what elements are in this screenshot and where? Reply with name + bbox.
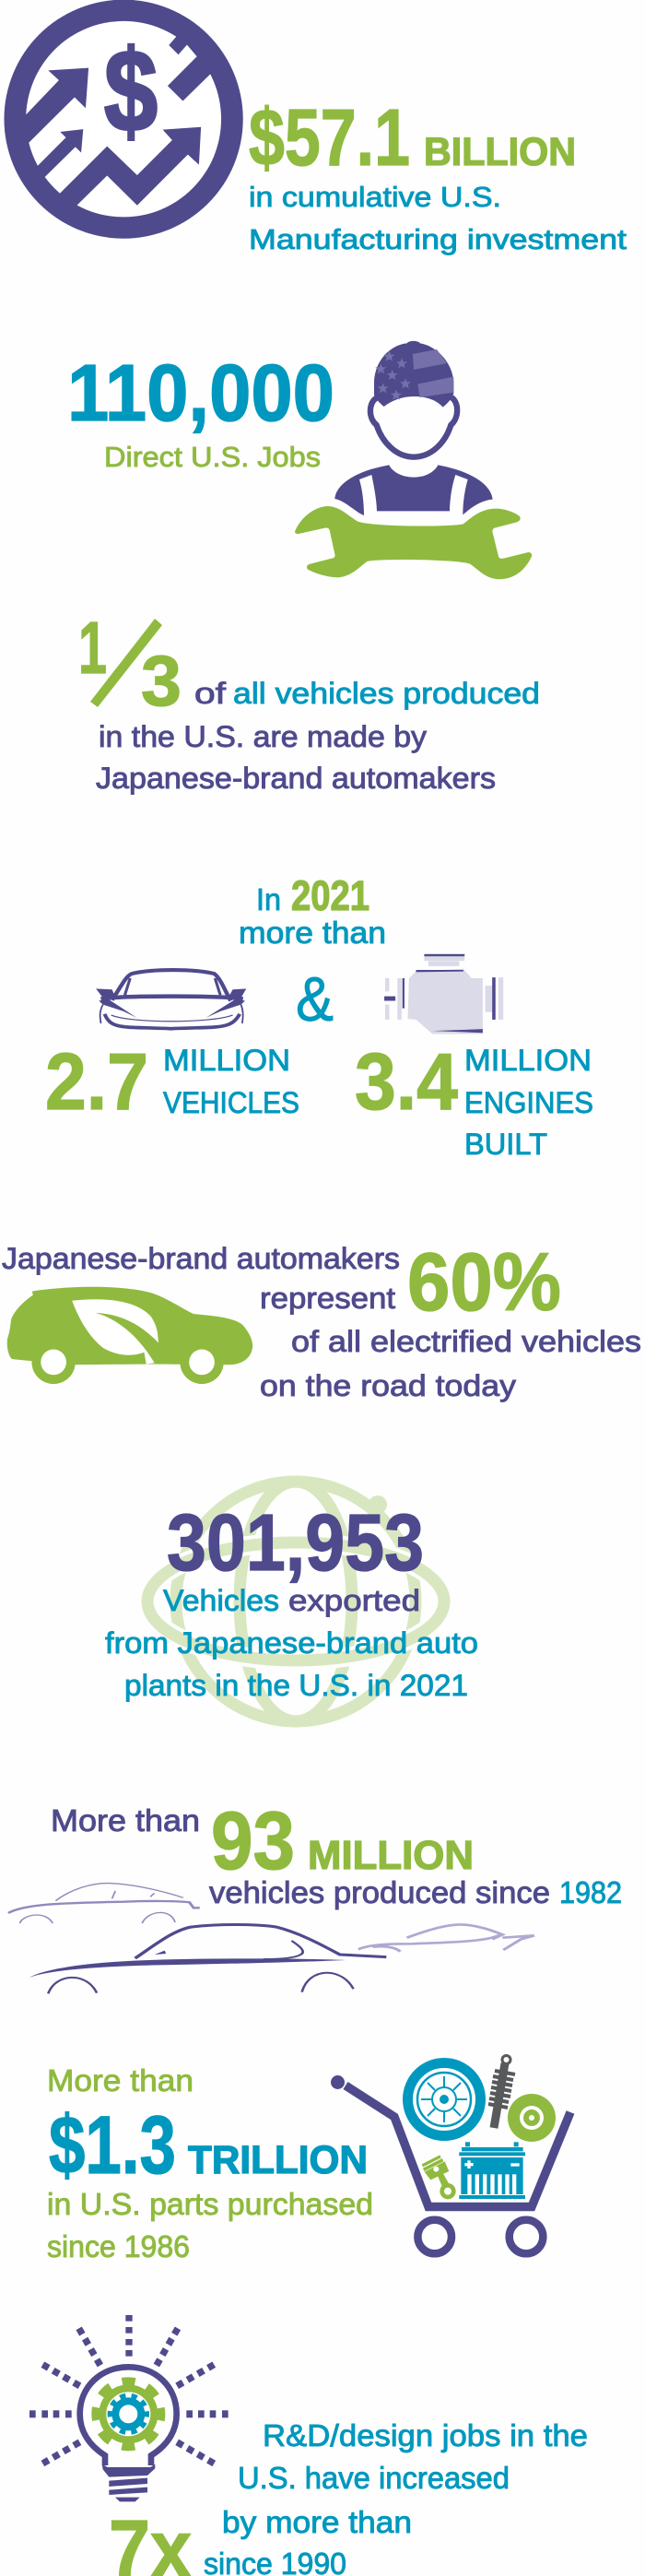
stat: 3.4 million engines built	[355, 1037, 593, 1161]
text: cumulative investment: Manufacturing investment	[249, 223, 627, 255]
text: vehicles exported from plants: Vehicles	[163, 1584, 279, 1617]
text: share of vehicles produced: of	[194, 677, 226, 710]
panel: 2021 production	[45, 872, 593, 1161]
figure: 301,953: 301,953	[167, 1498, 424, 1588]
heading: in 2021 more than: more than	[239, 916, 386, 950]
text: R&D design jobs increased	[109, 2418, 588, 2576]
brake disc	[508, 2094, 556, 2142]
icon: engine	[384, 954, 503, 1034]
text: more than 93 million: 1982	[559, 1875, 622, 1909]
stat: 3.4 million engines built: ENGINES	[464, 1086, 593, 1119]
figure: one third: 3	[141, 642, 182, 721]
panel: R&D jobs	[29, 2315, 588, 2576]
ampersand: &	[296, 964, 334, 1034]
icon: light bulb with gears	[29, 2315, 229, 2501]
text: Japanese-brand automakers represent 60%: of all electrified vehicles	[291, 1325, 641, 1358]
icon: green car with leaf	[7, 1287, 252, 1384]
text: R&D design jobs increased: by more than	[222, 2505, 412, 2539]
text: share of vehicles produced	[96, 677, 540, 795]
text: cumulative investment	[249, 181, 627, 255]
icon: dollar with rising arrows in ring: $	[104, 26, 158, 156]
icon: car silhouettes	[8, 1884, 534, 1993]
text: more than $1.3 trillion: More than	[47, 2063, 194, 2097]
text: Japanese-brand automakers represent 60%: 60%	[407, 1235, 561, 1328]
icon: shopping cart of parts	[331, 2056, 570, 2253]
stat: 3.4 million engines built: 3.4	[355, 1037, 458, 1127]
heading: in 2021 more than: In	[256, 882, 281, 916]
figure: one third: 1	[78, 607, 107, 689]
panel: one third of vehicles	[78, 607, 540, 795]
figure: $57.1 billion	[249, 93, 576, 183]
stat: 2.7 million vehicles	[45, 1037, 299, 1127]
piston	[422, 2155, 456, 2199]
text: vehicles exported from plants: from Japanese-brand auto	[105, 1626, 478, 1660]
light rays	[29, 2315, 229, 2466]
tire	[407, 2063, 481, 2135]
text: share of vehicles produced: Japanese-brand automakers	[96, 762, 496, 795]
text: R&D design jobs increased: R&D/design jobs in the	[263, 2418, 588, 2452]
text: more than $1.3 trillion: $1.3	[49, 2098, 176, 2191]
battery	[459, 2142, 525, 2199]
icon: worker with wrench	[295, 341, 532, 579]
heading: in 2021 more than	[239, 872, 386, 950]
text: Japanese-brand automakers represent 60%: represent	[260, 1282, 395, 1315]
figure: $57.1 billion: BILLION	[424, 130, 576, 174]
stat: 3.4 million engines built: MILLION	[464, 1044, 592, 1077]
panel: 93 million vehicles	[8, 1794, 622, 1993]
text: share of vehicles produced: all vehicles produced	[233, 677, 540, 710]
text: vehicles exported from plants: plants in the U.S. in 2021	[124, 1669, 468, 1702]
text: more than $1.3 trillion: since 1986	[47, 2229, 190, 2263]
text: share of vehicles produced: in the U.S. are made by	[99, 720, 427, 753]
figure: $57.1 billion: $57.1	[249, 93, 410, 183]
text: cumulative investment: in cumulative U.S.	[249, 181, 501, 213]
icon: globe watermark	[147, 1482, 444, 1721]
text: direct U.S. jobs: Direct U.S. Jobs	[104, 441, 321, 473]
icon: car front	[96, 970, 246, 1029]
icon: dollar with rising arrows in ring	[4, 0, 243, 239]
text: more than 93 million: 93	[211, 1794, 295, 1886]
text: Japanese-brand automakers represent 60%: Japanese-brand automakers	[2, 1242, 400, 1275]
text: more than 93 million: MILLION	[308, 1833, 474, 1878]
text: more than $1.3 trillion	[47, 2063, 373, 2263]
text: more than $1.3 trillion: in U.S. parts purchased	[47, 2187, 373, 2221]
text: vehicles exported from plants: exported	[288, 1584, 420, 1617]
stat: 2.7 million vehicles: MILLION	[163, 1044, 290, 1077]
text: Japanese-brand automakers represent 60%	[2, 1235, 641, 1402]
text: R&D design jobs increased: U.S. have increased	[238, 2461, 510, 2495]
text: more than $1.3 trillion: TRILLION	[188, 2138, 368, 2182]
stat: 3.4 million engines built: BUILT	[464, 1128, 547, 1161]
panel: electrified vehicles	[2, 1235, 641, 1402]
stat: 2.7 million vehicles: 2.7	[45, 1037, 148, 1127]
panel: manufacturing investment	[4, 0, 627, 255]
text: more than 93 million	[51, 1794, 622, 1909]
panel: vehicles exported	[105, 1482, 478, 1721]
text: more than 93 million: More than	[51, 1803, 200, 1837]
figure: one third	[78, 607, 182, 721]
heading: in 2021 more than: 2021	[291, 872, 369, 919]
text: Japanese-brand automakers represent 60%: on the road today	[260, 1369, 516, 1402]
stat: 2.7 million vehicles: VEHICLES	[163, 1086, 299, 1119]
figure: 110,000: 110,000	[67, 349, 334, 438]
text: vehicles exported from plants	[105, 1584, 478, 1702]
shock absorber	[488, 2056, 515, 2128]
text: more than 93 million: vehicles produced since	[209, 1875, 550, 1909]
panel: direct jobs	[67, 341, 532, 579]
panel: parts purchased	[47, 2056, 570, 2263]
